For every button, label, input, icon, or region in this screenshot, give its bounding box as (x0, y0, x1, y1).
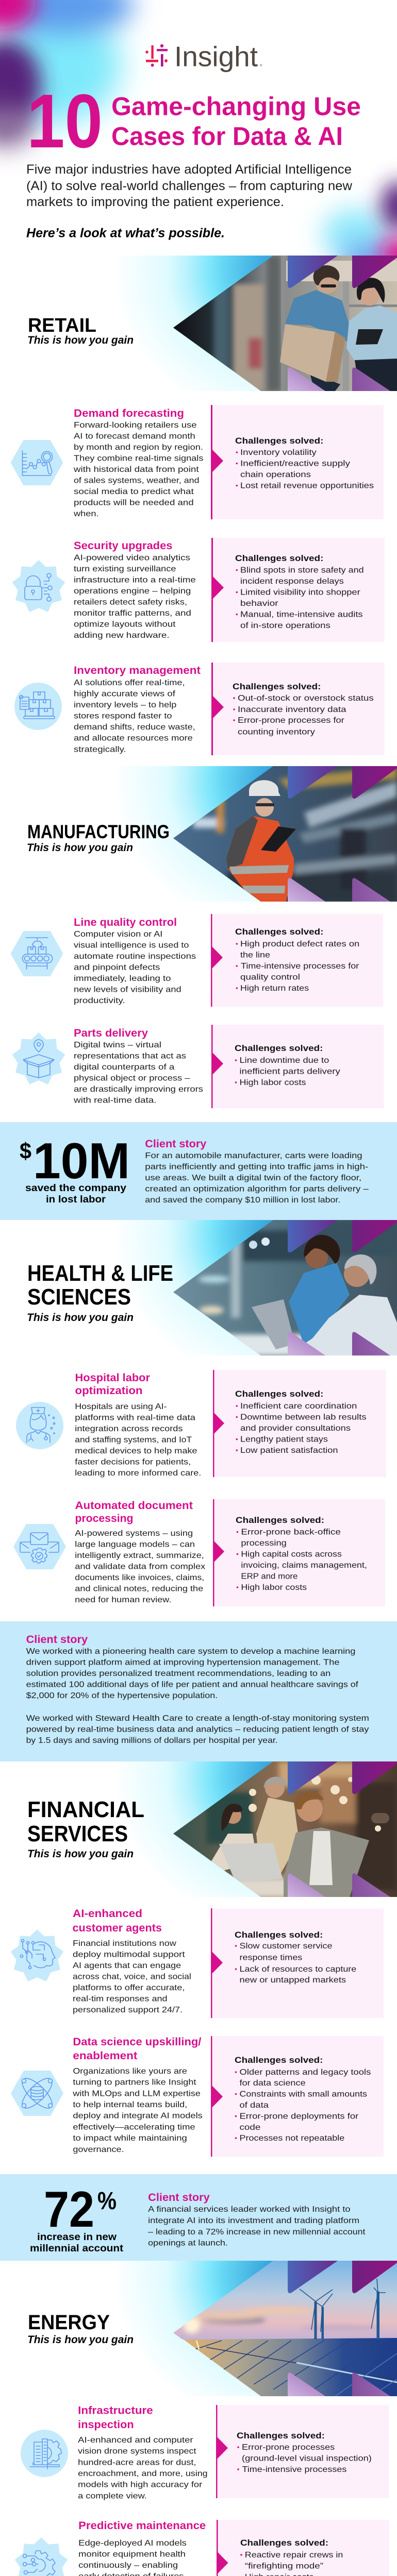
use case: predictive maintenance: monitor equipment health (78, 2550, 186, 2558)
use case: parts delivery: physical object or process – (74, 1074, 190, 1083)
panel: demand challenges: chain operations (240, 470, 311, 479)
panel: data science challenges: Challenges solved: (235, 2055, 323, 2065)
use case: hospital labor optimization: optimization (75, 1385, 142, 1397)
heading: manufacturing: This is how you gain (27, 842, 133, 854)
use case: AI-enhanced customer agents: AI-enhanced (73, 1908, 142, 1920)
panel: document challenges: Challenges solved: (236, 1515, 324, 1525)
panel: inventory challenges (211, 663, 385, 755)
panel: line quality challenges: High product defect rates on (240, 940, 359, 948)
use case: demand forecasting: by month and region by region. (74, 443, 203, 452)
panel: document challenges: ERP and more (241, 1572, 297, 1581)
use case: security upgrades: infrastructure into a real-time (74, 576, 196, 584)
use case: inventory management: AI solutions offer real-time, (74, 679, 185, 687)
icon: infrastructure building and gear (21, 2430, 68, 2477)
use case: data science upskilling: with MLOps and LLM expertise (72, 2089, 201, 2098)
use case: data science upskilling: effectively—accelerating time (73, 2123, 195, 2131)
client story text: openings at launch. (148, 2239, 228, 2247)
panel: infrastructure challenges: Error-prone processes (242, 2443, 335, 2452)
use case: data science upskilling (72, 2036, 203, 2154)
use case: AI-enhanced customer agents: real-tim responses and (73, 1995, 168, 2003)
panel: inventory challenges: Error-prone processes for (238, 716, 344, 725)
panel: line quality challenges: High return rates (240, 984, 309, 993)
use case: automated document processing: large language models – can (75, 1540, 195, 1549)
use case: automated document processing: intelligently extract, summarize, (75, 1551, 204, 1560)
panel: demand challenges: Lost retail revenue opportunities (240, 481, 374, 490)
use case: parts delivery: are drastically improving errors (74, 1085, 203, 1094)
icon: conveyor (10, 931, 63, 976)
panel: demand challenges: Inventory volatility (240, 448, 317, 457)
title: Cases for Data & AI (111, 122, 343, 150)
section banner: retail (127, 256, 397, 391)
use case: inventory management (74, 665, 201, 754)
use case: automated document processing: and validate data from complex (75, 1562, 205, 1571)
client story text (148, 2192, 366, 2247)
use case: hospital labor optimization: Hospitals are using AI- (75, 1402, 167, 1411)
use case: hospital labor optimization: leading to more informed care. (75, 1469, 201, 1478)
panel: security challenges: Blind spots in store safety and (240, 566, 364, 575)
use case: inventory management: and allocate resources more (74, 734, 193, 743)
heading: health and life sciences: HEALTH & LIFE (27, 1261, 173, 1286)
use case: infrastructure inspection (78, 2405, 208, 2500)
panel: document challenges: invoicing, claims management, (241, 1561, 367, 1570)
use case: infrastructure inspection: Infrastructure (78, 2405, 153, 2416)
panel: hospital challenges: Inefficient care coordination (240, 1402, 357, 1411)
client story text: For an automobile manufacturer, carts were loading (145, 1151, 362, 1160)
intro text: Five major industries have adopted Artificial Intelligence (26, 162, 352, 177)
use case: parts delivery: Parts delivery (74, 1027, 148, 1039)
panel: data science challenges: of data (239, 2101, 269, 2110)
use case: predictive maintenance: Predictive maintenance (78, 2520, 206, 2532)
use case: automated document processing: documents like invoices, claims, (75, 1573, 204, 1582)
panel: hospital challenges: Lengthy patient stays (240, 1435, 328, 1444)
client story text: created an optimization algorithm for parts delivery – (145, 1185, 369, 1193)
heading: financial services: This is how you gain (27, 1848, 134, 1860)
photo: financial team (173, 1761, 397, 1898)
panel: customer agent challenges: Challenges solved: (235, 1930, 323, 1940)
heading: retail: RETAIL (28, 315, 96, 336)
panel: customer agent challenges: Slow customer service (239, 1942, 333, 1951)
use case: AI-enhanced customer agents: Financial institutions now (73, 1939, 176, 1948)
panel: customer agent challenges (211, 1908, 384, 2018)
panel: hospital challenges: Challenges solved: (235, 1389, 323, 1399)
use case: demand forecasting: They combine real-time signals (74, 454, 203, 463)
use case: automated document processing: AI-powered systems – using (75, 1529, 193, 1538)
use case: automated document processing: need for human review. (75, 1596, 171, 1604)
client story band: health: solution provides personalized treatment recommendations, leading to an (26, 1669, 330, 1678)
icon: AI head (11, 1929, 63, 1981)
panel: predictive challenges: “firefighting mode” (245, 2562, 323, 2571)
stat: $10M: saved the company (25, 1183, 126, 1194)
logo: Insight: ® (260, 64, 262, 67)
use case: automated document processing: processing (75, 1513, 133, 1524)
use case: demand forecasting: with historical data from point (73, 465, 199, 474)
use case: automated document processing: Automated document (75, 1500, 193, 1512)
use case: infrastructure inspection: vision drone systems inspect (78, 2447, 196, 2456)
intro text (26, 162, 353, 240)
panel: parts challenges: inefficient parts delivery (239, 1067, 340, 1076)
logo: Insight: Insight (174, 40, 258, 72)
use case: security upgrades: AI-powered video analytics (74, 553, 190, 563)
section banner: energy (127, 2261, 397, 2396)
panel: security challenges: behavior (240, 599, 279, 608)
panel: line quality challenges (211, 914, 383, 1007)
use case: line quality control: automate routine inspections (74, 952, 196, 961)
use case: security upgrades (74, 540, 196, 640)
use case: line quality control: Computer vision or AI (74, 930, 162, 939)
use case: predictive maintenance: Edge-deployed AI models (78, 2539, 187, 2548)
photo: warehouse workers (173, 256, 397, 392)
panel: parts challenges: Challenges solved: (235, 1043, 323, 1053)
panel: infrastructure challenges (216, 2405, 389, 2498)
use case: AI-enhanced customer agents: platforms to offer accurate, (73, 1984, 185, 1992)
client story band: health: estimated 100 additional days of life per patient and annual healthcare savings of (26, 1681, 358, 1689)
use case: AI-enhanced customer agents: personalized support 24/7. (73, 2006, 183, 2014)
heading: health and life sciences: SCIENCES (27, 1284, 131, 1310)
use case: data science upskilling: Organizations like yours are (73, 2067, 187, 2076)
use case: security upgrades: Security upgrades (74, 540, 172, 552)
client story band: health: We worked with a pioneering health care system to develop a machine learning (26, 1647, 355, 1656)
client story band: health: by 1.5 days and saving millions of dollars per hospital per year. (26, 1736, 278, 1745)
panel: predictive challenges: Reactive repair crews in (245, 2551, 343, 2560)
panel: data science challenges: for data science (239, 2079, 306, 2088)
photo: factory engineer (173, 766, 397, 903)
heading: financial services: SERVICES (27, 1821, 128, 1846)
panel: customer agent challenges: new or untapped markets (239, 1976, 346, 1985)
use case: infrastructure inspection: hundred-acre areas for dust, (78, 2458, 196, 2467)
client story band: health: Client story (26, 1634, 88, 1646)
client story text (145, 1138, 369, 1205)
panel: data science challenges: code (239, 2123, 260, 2132)
use case: data science upskilling: turning to partners like Insight (73, 2078, 196, 2087)
panel: customer agent challenges: Lack of resources to capture (239, 1965, 356, 1974)
use case: demand forecasting: Demand forecasting (74, 408, 184, 419)
panel: inventory challenges: Challenges solved: (233, 682, 321, 691)
use case: data science upskilling: enablement (73, 2050, 137, 2062)
use case: AI-enhanced customer agents (72, 1908, 191, 2014)
panel: security challenges: of in-store operations (240, 621, 330, 630)
use case: inventory management: demand shifts, reduce waste, (74, 723, 195, 732)
panel: security challenges: Manual, time-intensive audits (240, 610, 363, 619)
use case: infrastructure inspection: models with high accuracy for (78, 2481, 203, 2489)
use case: inventory management: inventory levels – to help (74, 701, 176, 709)
icon: predictive maintenance gear (15, 2537, 68, 2576)
use case: security upgrades: monitor traffic patterns, and (74, 609, 191, 618)
use case: demand forecasting: when. (73, 510, 99, 518)
client story band: health: $2,000 for 20% of the hypertensive population. (26, 1691, 218, 1700)
panel: parts challenges (211, 1025, 384, 1108)
use case: data science upskilling: to help internal teams build, (73, 2100, 187, 2109)
panel: security challenges: incident response delays (240, 577, 344, 586)
client story text: Client story (148, 2192, 210, 2204)
title: Game-changing Use (111, 92, 361, 121)
panel: data science challenges: Older patterns and legacy tools (239, 2068, 371, 2077)
icon: security lock (12, 560, 65, 612)
use case: hospital labor optimization: Hospital labor (75, 1372, 150, 1384)
panel: inventory challenges: counting inventory (238, 727, 315, 737)
use case: inventory management: highly accurate views of (74, 689, 176, 699)
use case: AI-enhanced customer agents: deploy multimodal support (73, 1951, 185, 1959)
use case: demand forecasting: Forward-looking retailers use (74, 421, 197, 430)
use case: hospital labor optimization (75, 1372, 201, 1478)
use case: data science upskilling: Data science upskilling/ (73, 2036, 202, 2048)
panel: document challenges: High labor costs (241, 1583, 307, 1592)
photo: solar panels and wind turbines (173, 2261, 397, 2396)
use case: automated document processing (75, 1500, 205, 1604)
panel: line quality challenges: Challenges solved: (235, 927, 323, 937)
panel: infrastructure challenges: (ground-level visual inspection) (242, 2454, 372, 2463)
use case: security upgrades: turn existing surveillance (74, 565, 176, 573)
use case: hospital labor optimization: faster decisions for patients, (75, 1458, 191, 1466)
panel: data science challenges: Processes not repeatable (239, 2134, 344, 2143)
panel: document challenges: High capital costs across (241, 1550, 342, 1559)
section banner: health (127, 1220, 397, 1355)
use case: parts delivery: Digital twins – virtual (74, 1041, 161, 1049)
icon: demand chart (10, 440, 63, 485)
heading: financial services (27, 1797, 144, 1860)
stat: $10M (20, 1132, 130, 1205)
use case: data science upskilling: to impact while maintaining (73, 2134, 187, 2143)
use case: inventory management: strategically. (74, 745, 126, 754)
intro text: (AI) to solve real-world challenges – from capturing new (26, 179, 353, 193)
icon: data science atom (11, 2071, 63, 2116)
intro text: Here’s a look at what’s possible. (26, 226, 225, 240)
panel: infrastructure challenges: Time-intensive processes (242, 2465, 346, 2474)
icon: inventory boxes (14, 683, 62, 730)
panel: demand challenges: Challenges solved: (235, 436, 323, 446)
use case: automated document processing: and clinical notes, reducing the (75, 1585, 203, 1593)
panel: predictive challenges (217, 2520, 389, 2576)
use case: security upgrades: retailers detect safety risks, (74, 598, 187, 607)
client story band: health: driven support platform aimed at improving hypertension management. The (26, 1658, 340, 1667)
panel: inventory challenges: Inaccurate inventory data (238, 705, 346, 714)
heading: manufacturing (27, 821, 170, 854)
use case: parts delivery (73, 1027, 203, 1105)
panel: line quality challenges: quality control (240, 973, 300, 982)
stat: 72%: % (97, 2188, 117, 2215)
client story text: Client story (145, 1138, 207, 1150)
use case: infrastructure inspection: encroachment, and more, using (78, 2469, 208, 2478)
heading: energy: This is how you gain (27, 2334, 134, 2346)
use case: AI-enhanced customer agents: customer agents (72, 1922, 162, 1934)
use case: demand forecasting (73, 408, 203, 518)
use case: demand forecasting: products will be needed and (74, 499, 194, 507)
intro text: markets to improving the patient experience. (26, 195, 284, 209)
use case: line quality control: new levels of visibility and (74, 985, 181, 994)
stat: 72%: millennial account (30, 2243, 124, 2254)
panel: security challenges: Limited visibility into shopper (240, 588, 360, 597)
use case: infrastructure inspection: a complete view. (78, 2492, 147, 2500)
use case: security upgrades: optimize layouts without (74, 620, 176, 629)
use case: line quality control: visual intelligence is used to (74, 941, 189, 950)
client story band: 72% (0, 2174, 397, 2261)
heading: energy: ENERGY (28, 2311, 110, 2334)
client story band: health: powered by real-time business data and analytics – reducing patient length of stay (26, 1725, 369, 1734)
icon: document processing (13, 1524, 66, 1569)
stat: $10M: 10M (33, 1132, 130, 1189)
panel: parts challenges: High labor costs (239, 1078, 306, 1087)
client story text: use areas. We built a digital twin of the factory floor, (145, 1174, 361, 1182)
heading: health and life sciences (27, 1261, 173, 1324)
client story text: integrate AI into its investment and trading platform (148, 2216, 359, 2225)
use case: line quality control: Line quality control (74, 917, 177, 928)
use case: line quality control: immediately, leading to (74, 974, 171, 983)
photo: nurse and doctor (173, 1220, 397, 1356)
panel: hospital challenges: Low patient satisfaction (240, 1446, 338, 1455)
panel: data science challenges (211, 2036, 384, 2157)
panel: security challenges: Challenges solved: (235, 553, 323, 563)
heading: energy (27, 2311, 134, 2346)
use case: security upgrades: operations engine – helping (74, 587, 191, 596)
use case: hospital labor optimization: platforms with real-time data (75, 1414, 195, 1422)
stat: $10M: $ (20, 1139, 31, 1164)
use case: line quality control (74, 917, 196, 1005)
panel: inventory challenges: Out-of-stock or overstock status (238, 694, 374, 703)
client story text: A financial services leader worked with Insight to (148, 2205, 351, 2214)
use case: inventory management: Inventory management (74, 665, 201, 676)
panel: document challenges (213, 1499, 385, 1606)
client story text: and saved the company $10 million in lost labor. (145, 1196, 340, 1205)
panel: document challenges: processing (241, 1539, 287, 1548)
panel: data science challenges: Constraints with small amounts (239, 2090, 367, 2099)
panel: security challenges (211, 538, 385, 642)
use case: security upgrades: adding new hardware. (74, 631, 170, 640)
stat: 72%: increase in new (37, 2232, 117, 2243)
stat: 72% (30, 2181, 124, 2254)
panel: hospital challenges: Downtime between lab results (240, 1413, 366, 1422)
use case: line quality control: productivity. (74, 996, 125, 1005)
use case: demand forecasting: of sales systems, weather, and (74, 476, 199, 485)
use case: data science upskilling: deploy and integrate AI models (73, 2112, 203, 2121)
client story band: $10M (0, 1122, 397, 1220)
use case: hospital labor optimization: medical devices to help make (75, 1447, 197, 1455)
use case: demand forecasting: AI to forecast demand month (74, 432, 195, 441)
title (27, 79, 361, 164)
panel: infrastructure challenges: Challenges solved: (237, 2431, 325, 2441)
panel: line quality challenges: Time-intensive processes for (241, 962, 359, 971)
panel: customer agent challenges: response times (239, 1954, 302, 1962)
title: 10 (27, 79, 103, 164)
section banner: manufacturing (127, 766, 397, 902)
heading: financial services: FINANCIAL (27, 1797, 144, 1822)
icon: parts box (12, 1032, 65, 1084)
heading: retail (27, 315, 134, 346)
wind turbines (300, 2279, 386, 2339)
heading: retail: This is how you gain (27, 334, 134, 346)
use case: data science upskilling: governance. (73, 2145, 124, 2154)
use case: parts delivery: with real-time data. (73, 1096, 157, 1105)
panel: demand challenges: Inefficient/reactive supply (240, 460, 350, 468)
client story text: – leading to a 72% increase in new millennial account (148, 2228, 366, 2236)
use case: hospital labor optimization: and staffing systems, and IoT (75, 1435, 192, 1445)
heading: health and life sciences: This is how you gain (27, 1312, 134, 1324)
use case: AI-enhanced customer agents: AI agents that can engage (73, 1961, 181, 1970)
panel: parts challenges: Line downtime due to (239, 1056, 329, 1065)
use case: infrastructure inspection: inspection (78, 2419, 134, 2431)
client story band: health: We worked with Steward Health Care to create a length-of-stay monitoring system (26, 1714, 369, 1723)
use case: inventory management: stores respond faster to (74, 712, 172, 720)
use case: predictive maintenance (78, 2520, 206, 2576)
heading: manufacturing: MANUFACTURING (27, 821, 170, 842)
client story text: parts inefficiently and getting into traffic jams in high- (145, 1162, 368, 1172)
hero gradient background (0, 0, 397, 276)
use case: infrastructure inspection: AI-enhanced and computer (78, 2436, 193, 2445)
stat: 72%: 72 (44, 2181, 94, 2238)
use case: parts delivery: representations that act as (74, 1052, 186, 1060)
panel: hospital challenges (213, 1370, 386, 1477)
icon: nurse (16, 1402, 63, 1449)
use case: parts delivery: digital counterparts of a (74, 1063, 175, 1072)
stat: $10M: in lost labor (46, 1194, 106, 1205)
use case: AI-enhanced customer agents: across chat, voice, and social (73, 1972, 191, 1981)
panel: line quality challenges: the line (240, 951, 270, 959)
panel: hospital challenges: and provider consultations (240, 1424, 351, 1433)
client story band: health (0, 1621, 397, 1761)
use case: line quality control: and pinpoint defects (74, 963, 160, 972)
panel: data science challenges: Error-prone deployments for (239, 2112, 359, 2121)
panel: demand challenges (211, 405, 384, 519)
panel: predictive challenges: Challenges solved: (240, 2538, 328, 2548)
use case: hospital labor optimization: integration across records (75, 1425, 183, 1433)
use case: predictive maintenance: continuously – enabling (78, 2561, 178, 2570)
use case: demand forecasting: social media to predict what (74, 487, 194, 496)
panel: document challenges: Error-prone back-office (241, 1528, 341, 1536)
section banner: financial (127, 1761, 397, 1897)
